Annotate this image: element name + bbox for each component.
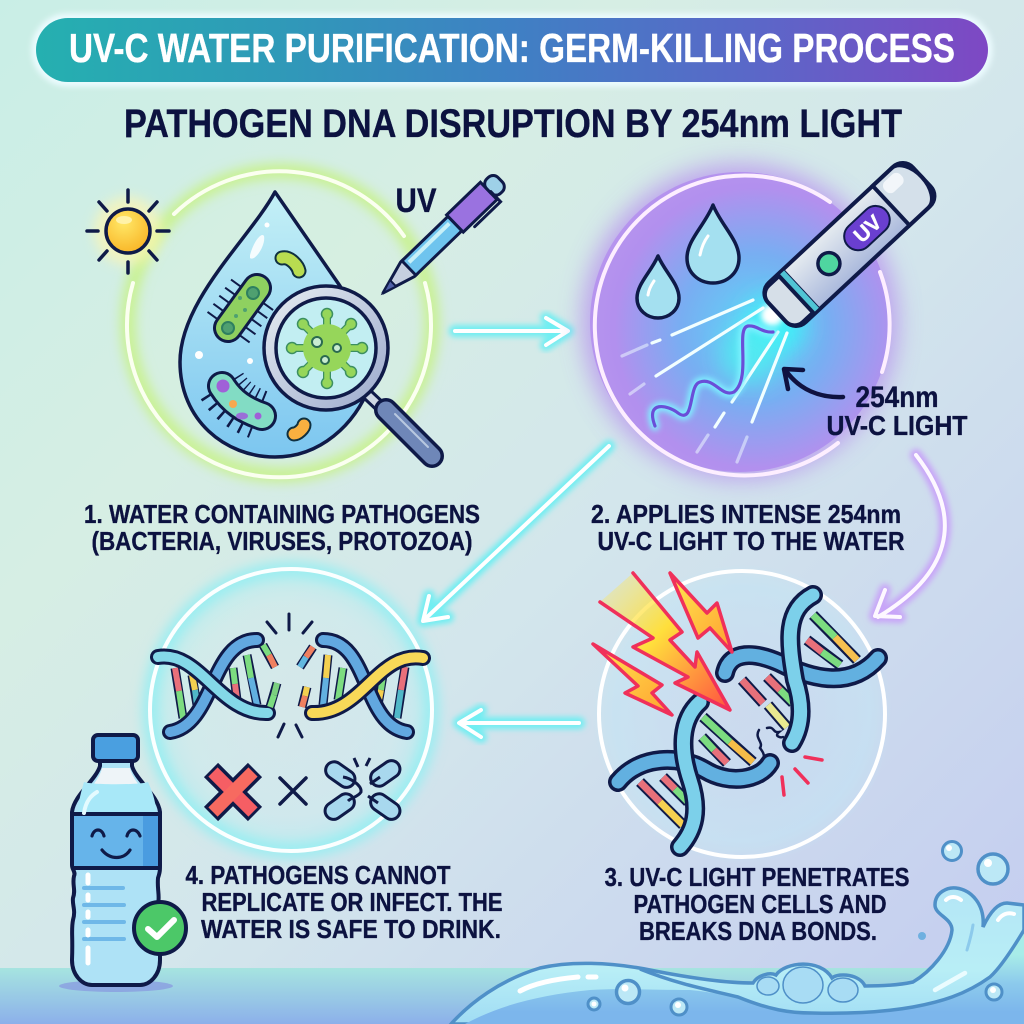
bottle face (92, 830, 140, 858)
icon: UV pen (375, 171, 511, 305)
UV wave (653, 326, 773, 426)
step 1 caption (84, 499, 480, 556)
step 3 caption: BREAKS DNA BONDS. (639, 916, 877, 946)
step 3 caption: 3. UV-C LIGHT PENETRATES (604, 862, 910, 892)
DNA strands (618, 595, 878, 847)
step 3 caption: PATHOGEN CELLS AND (634, 889, 886, 919)
icon: virus (286, 308, 368, 388)
light beams (622, 295, 805, 462)
icon: UV flashlight (759, 157, 940, 332)
icon: water bottle (59, 735, 186, 992)
crack ticks (267, 614, 312, 737)
panel: step 3 DNA break (592, 564, 892, 864)
UV label: UV (396, 182, 437, 220)
arrow: step 2 to step 3 (875, 455, 945, 617)
step 1 caption: 1. WATER CONTAINING PATHOGENS (84, 499, 480, 529)
rungs upper helix (742, 615, 857, 727)
DNA right fragment (300, 640, 423, 732)
callout: 254nm UV-C light: 254nm (856, 381, 938, 414)
step 1 caption: (BACTERIA, VIRUSES, PROTOZOA) (92, 526, 472, 556)
step 4 caption: 4. PATHOGENS CANNOT (186, 860, 451, 890)
icon: lightning bolts (593, 573, 732, 715)
bottom water band (0, 968, 1024, 1024)
icon: magnifying glass with virus (264, 286, 432, 456)
panel: step 4 replication blocked (150, 569, 432, 851)
subtitle: PATHOGEN DNA DISRUPTION BY 254nm LIGHT (124, 102, 902, 146)
icon: red X (211, 770, 255, 814)
step 2 caption (591, 499, 905, 556)
DNA left fragment (158, 640, 277, 732)
panel: step 1 water with pathogens (87, 171, 511, 477)
icon: water drop (180, 192, 372, 457)
step 4 caption: WATER IS SAFE TO DRINK. (201, 914, 501, 944)
panel: step 2 UV-C light (582, 157, 968, 480)
icon: water drops (637, 205, 739, 318)
callout: 254nm UV-C light: UV-C LIGHT (826, 410, 968, 441)
step 2 caption: 2. APPLIES INTENSE 254nm (591, 499, 901, 529)
arrow: step 3 to step 4 (459, 710, 579, 737)
step 2 caption: UV-C LIGHT TO THE WATER (598, 526, 905, 556)
step 4 caption: REPLICATE OR INFECT. THE (202, 887, 502, 917)
water splash (451, 842, 1024, 1024)
icon: check badge (134, 902, 186, 954)
icon: sun (87, 190, 169, 273)
icon: UV flashlight: UV (849, 211, 886, 248)
icon: small multiply sign (280, 778, 306, 804)
icon: broken chain (322, 757, 403, 823)
arrow: step 1 to step 2 (455, 318, 568, 345)
title banner (36, 18, 988, 82)
arrow: step 2 to step 4 (423, 446, 609, 621)
step 4 caption (186, 860, 502, 944)
bacterium green (222, 287, 259, 334)
callout: 254nm UV-C light (784, 369, 968, 441)
step 3 caption (604, 862, 910, 946)
rungs lower helix (640, 717, 753, 825)
crack marks (758, 728, 822, 795)
bacterium teal (216, 380, 262, 420)
bubbles (588, 842, 1008, 1015)
